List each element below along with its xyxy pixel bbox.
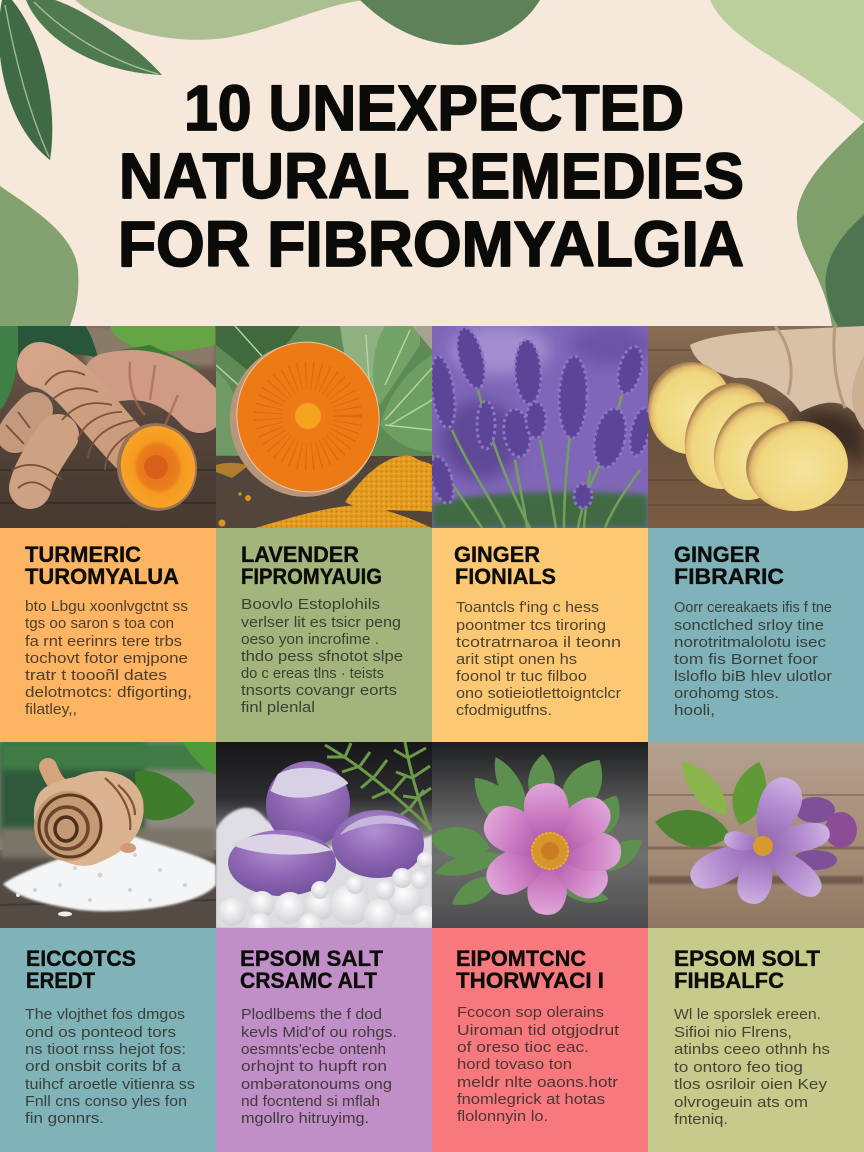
heading: EPSOM SALT: [240, 946, 384, 971]
petals: [477, 781, 622, 916]
photo: turmeric root: [0, 326, 216, 528]
heading: EIPOMTCNC: [456, 946, 586, 971]
text block: flolonnyin lo.: [457, 1108, 548, 1125]
heading: GINGER: [454, 542, 540, 567]
text block: Fnll cns conso yles fon: [25, 1093, 187, 1110]
text block: Wl le sporslek ereen.: [674, 1006, 821, 1023]
text block: lsloflo biB hlev ulotlor: [674, 668, 832, 685]
panel: eiccotcs: [0, 928, 216, 1152]
text block: verlser lit es tsicr peng: [241, 614, 401, 631]
heading: CRSAMC ALT: [240, 968, 378, 993]
text block: ns tioot rnss hejot fos:: [25, 1041, 186, 1058]
heading: FIBRARIC: [674, 564, 784, 589]
text block: norotritmalolotu isec: [674, 634, 827, 651]
text block: tgs oo saron s toa con: [25, 615, 174, 632]
text block: atinbs ceeo othnh hs: [674, 1041, 830, 1058]
heading: [674, 542, 784, 589]
text block: meldr nlte oaons.hotr: [457, 1074, 618, 1091]
text block: oesmnts'ecbe ontenh: [241, 1041, 386, 1058]
text block: to ontoro feo tiog: [674, 1059, 803, 1076]
text block: nd focntend si mflah: [241, 1093, 380, 1110]
text block: fin gonnrs.: [25, 1110, 104, 1127]
photo: pink flower: [426, 742, 649, 928]
text block: tlos osriloir oien Key: [674, 1076, 828, 1093]
heading: [26, 946, 136, 993]
panel: ginger fibraric: [648, 528, 864, 742]
text block: tom fis Bornet foor: [674, 651, 818, 668]
text block: orhojnt to hupft ron: [241, 1058, 387, 1075]
text block: filatley,,: [25, 701, 77, 718]
text block: do c ereas tlns · teists: [241, 665, 384, 682]
text block: fnomlegrick at hotas: [457, 1091, 605, 1108]
photo: lavender: [426, 325, 654, 528]
text block: bto Lbgu xoonlvgctnt ss: [25, 598, 188, 615]
photo: purple stones and white pebbles: [216, 742, 438, 937]
header background: [0, 0, 864, 326]
text block: of oreso tioc eac.: [457, 1039, 589, 1056]
text block: orohomg stos.: [674, 685, 779, 702]
decorative shape: right dark green blob: [825, 215, 864, 326]
heading: [25, 542, 179, 589]
text block: delotmotcs: dfigorting,: [25, 684, 192, 701]
icon: leaf top: [26, 0, 162, 75]
text block: [25, 598, 192, 718]
text block: mgollro hitruyimg.: [241, 1110, 369, 1127]
text block: [456, 599, 621, 719]
root: [48, 767, 72, 792]
heading: TURMERIC: [25, 542, 141, 567]
photo: purple flower on wood: [648, 742, 864, 928]
heading: FIONIALS: [455, 564, 556, 589]
decorative shape: top dark green blob: [360, 0, 540, 45]
heading: EREDT: [26, 968, 96, 993]
text block: Uiroman tid otgjodrut: [457, 1022, 620, 1039]
main root: [40, 365, 150, 468]
heading: [454, 542, 556, 589]
panel: eipomtcnc: [432, 928, 648, 1152]
leaves: [432, 754, 642, 905]
text block: olvrogeuin ats om: [674, 1094, 808, 1111]
photo: ginger slices: [644, 326, 864, 528]
heading: THORWYACI I: [456, 968, 604, 993]
text block: Boovlo Estoplohils: [241, 596, 380, 613]
panel: epsom solt: [648, 928, 864, 1152]
text block: Sifioi nio Flrens,: [674, 1024, 792, 1041]
decorative shape: left green blob: [0, 186, 78, 326]
text block: cfodmigutfns.: [456, 702, 552, 719]
text block: Fcocon sop olerains: [457, 1004, 604, 1021]
text block: finl plenlal: [241, 699, 315, 716]
text block: ond os ponteod tors: [25, 1024, 176, 1041]
icon: leaf left: [0, 0, 52, 160]
text block: [457, 1004, 620, 1125]
panel: epsom salt crsamc alt: [216, 928, 432, 1152]
photo: turmeric slice and powder: [216, 326, 432, 528]
heading: [241, 542, 382, 589]
title: FOR FIBROMYALGIA: [118, 208, 744, 280]
decorative shape: right mid green blob: [797, 122, 864, 326]
text block: Plodlbems the f dod: [241, 1006, 382, 1023]
text block: tnsorts covangr eorts: [241, 682, 397, 699]
heading: [674, 946, 821, 993]
text block: foonol tr tuc filboo: [456, 668, 587, 685]
text block: tratr t toooñl dates: [25, 667, 167, 684]
text block: arit stipt onen hs: [456, 651, 577, 668]
text block: The vlojthet fos dmgos: [25, 1006, 185, 1023]
text block: hord tovaso ton: [457, 1056, 572, 1073]
text block: oeso yon incrofime .: [241, 631, 379, 648]
panel: lavender: [216, 528, 432, 742]
photo: root with salt: [0, 742, 216, 928]
text block: Oorr cereakaets ifis f tne: [674, 599, 832, 616]
text block: kevls Mid'of ou rohgs.: [241, 1024, 397, 1041]
title: NATURAL REMEDIES: [119, 140, 744, 212]
heading: [456, 946, 604, 993]
heading: [240, 946, 384, 993]
heading: EICCOTCS: [26, 946, 136, 971]
upper lobe: [108, 375, 200, 408]
heading: LAVENDER: [241, 542, 359, 567]
decorative shape: top light green blob: [75, 0, 365, 40]
text block: fnteniq.: [674, 1111, 728, 1128]
heading: EPSOM SOLT: [674, 946, 821, 971]
heading: GINGER: [674, 542, 760, 567]
title: [118, 72, 744, 280]
text block: ono sotieiotlettoigntclcr: [456, 685, 621, 702]
text block: [674, 599, 832, 719]
text block: [25, 1006, 195, 1127]
text block: hooli,: [674, 702, 715, 719]
text block: ombəratonoums ong: [241, 1076, 392, 1093]
decorative shape: top right green blob: [710, 0, 864, 122]
text block: tuihcf aroetle vitienra ss: [25, 1076, 195, 1093]
text block: Toantcls f'ing c hess: [456, 599, 599, 616]
text block: ord onsbit corits bf a: [25, 1058, 182, 1075]
text block: tochovt fotor emjpone: [25, 650, 188, 667]
panel: turmeric: [0, 528, 216, 742]
text block: poontmer tcs tiroring: [456, 617, 606, 634]
text block: tcotratrnaroa il teonn: [456, 634, 621, 651]
heading: TUROMYALUA: [25, 564, 179, 589]
salt pile: [3, 835, 216, 911]
text block: [674, 1006, 830, 1128]
title: 10 UNEXPECTED: [184, 72, 684, 144]
text block: [241, 1006, 397, 1127]
text block: thdo pess sfnotot slpe: [241, 648, 403, 665]
heading: FIPROMYAUIG: [241, 564, 382, 589]
heading: FIHBALFC: [674, 968, 784, 993]
text block: sonctlched srloy tine: [674, 617, 824, 634]
left lobes: [15, 410, 35, 435]
text block: [241, 596, 403, 716]
text block: fa rnt eerinrs tere trbs: [25, 633, 182, 650]
panel: ginger fionials: [432, 528, 648, 742]
